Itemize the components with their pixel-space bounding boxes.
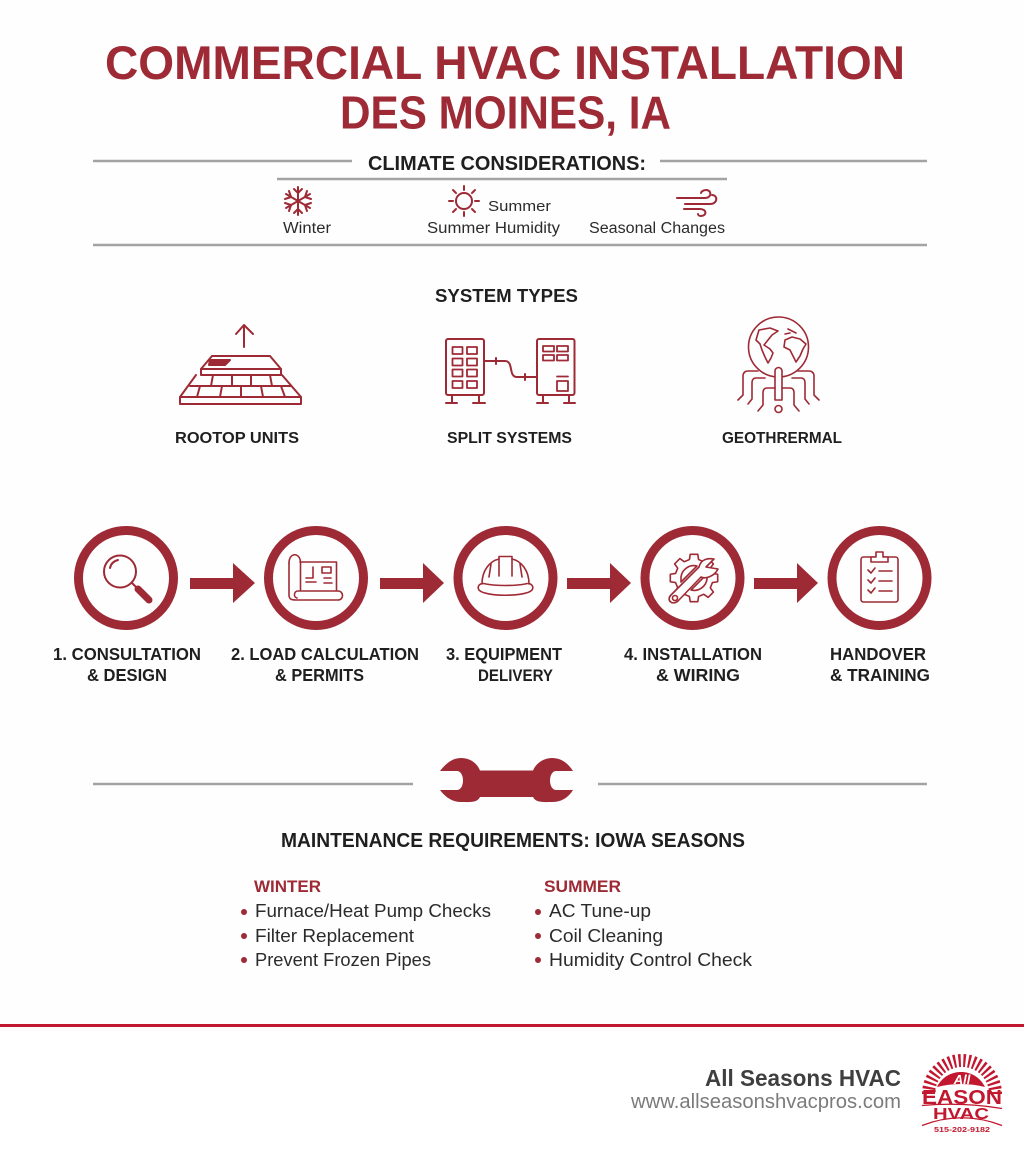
panel: installation process <box>53 530 930 685</box>
step 1: consultation and design <box>53 530 201 685</box>
step 5: handover and training: HANDOVER <box>830 644 926 664</box>
arrow 4 <box>754 563 818 603</box>
step 3: equipment delivery: DELIVERY <box>478 666 554 685</box>
list: summer <box>535 877 753 970</box>
list: winter: Furnace/Heat Pump Checks <box>255 901 491 921</box>
list: winter: Prevent Frozen Pipes <box>255 950 431 970</box>
step 5: handover and training: & TRAINING <box>830 665 930 685</box>
step 4: installation and wiring <box>624 530 762 685</box>
label: summer: Summer <box>488 198 551 215</box>
logo: 515-202-9182 <box>934 1125 990 1134</box>
list: summer: Humidity Control Check <box>549 950 753 970</box>
step 2: load calculation and permits <box>231 530 419 685</box>
icon: snowflake <box>285 187 311 215</box>
icon: geothermal globe <box>738 317 819 412</box>
panel: footer <box>0 1024 1024 1154</box>
title: COMMERCIAL HVAC INSTALLATION <box>105 36 905 89</box>
logo: All <box>953 1072 971 1087</box>
website: www.allseasonshvacpros.com <box>630 1091 901 1113</box>
list: summer: SUMMER <box>544 877 621 896</box>
panel: climate considerations <box>93 153 927 245</box>
icon: rooftop unit <box>180 325 301 404</box>
arrow 2 <box>380 563 444 603</box>
label: rooftop units: ROOTOP UNITS <box>175 430 299 447</box>
list: summer: Coil Cleaning <box>549 926 663 946</box>
step 2: load calculation and permits: & PERMITS <box>275 665 364 685</box>
list: winter <box>241 877 491 970</box>
panel: system types <box>175 286 842 447</box>
logo: EASON <box>922 1087 1002 1109</box>
icon: wrench <box>440 758 573 802</box>
icon: sun <box>449 186 479 216</box>
label: winter: Winter <box>283 220 331 237</box>
step 2: load calculation and permits: 2. LOAD CALCULATION <box>231 644 419 664</box>
logo <box>922 1060 1002 1134</box>
label: geothermal: GEOTHRERMAL <box>722 430 842 447</box>
heading: system types: SYSTEM TYPES <box>435 286 578 306</box>
label: split systems: SPLIT SYSTEMS <box>447 430 572 447</box>
step 5: handover and training <box>830 530 930 685</box>
icon: split system <box>446 339 575 403</box>
list: winter: WINTER <box>254 877 321 896</box>
list: summer: AC Tune-up <box>549 901 651 921</box>
label: summer humidity: Summer Humidity <box>427 220 560 237</box>
step 3: equipment delivery <box>446 530 562 685</box>
step 1: consultation and design: & DESIGN <box>87 665 167 685</box>
list: winter: Filter Replacement <box>255 926 414 946</box>
title: DES MOINES, IA <box>340 86 671 138</box>
step 3: equipment delivery: 3. EQUIPMENT <box>446 644 562 664</box>
title <box>105 36 905 138</box>
label: seasonal changes: Seasonal Changes <box>589 220 725 237</box>
step 4: installation and wiring: & WIRING <box>656 665 740 685</box>
icon: wind <box>677 190 716 216</box>
step 4: installation and wiring: 4. INSTALLATION <box>624 644 762 664</box>
arrow 1 <box>190 563 255 603</box>
heading: climate considerations: CLIMATE CONSIDERATIONS: <box>368 153 646 175</box>
step 1: consultation and design: 1. CONSULTATION <box>53 644 201 664</box>
company name: All Seasons HVAC <box>705 1065 901 1091</box>
logo: HVAC <box>933 1106 989 1123</box>
heading: maintenance requirements: MAINTENANCE REQUIREMENTS: IOWA SEASONS <box>281 830 745 852</box>
arrow 3 <box>567 563 631 603</box>
panel: maintenance requirements <box>93 758 927 970</box>
